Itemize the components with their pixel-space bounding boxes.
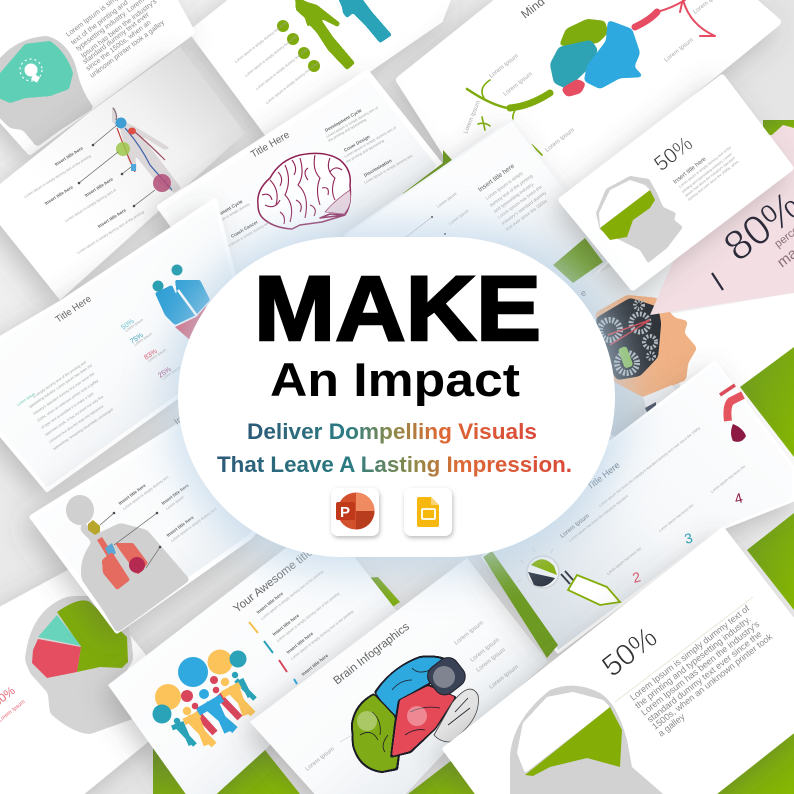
panel: center insert title slide — [345, 120, 610, 310]
side text: the printing and typesetting — [328, 118, 367, 143]
paragraph: a galley — [656, 711, 687, 739]
brain labels: Lorem Ipsum — [489, 664, 520, 691]
green stripe — [483, 551, 558, 658]
body text: typesetting, remaining essentially unchanged — [52, 407, 114, 451]
green icon circles — [277, 20, 320, 72]
pink branch — [635, 0, 715, 36]
paragraph: unknown printer took a galley — [89, 19, 166, 80]
step numbers: 3 — [683, 529, 695, 547]
list items: Insert title here — [301, 653, 329, 677]
step numbers: Lorem Ipsum has been the — [606, 546, 642, 576]
heading: MAKE: MAKE — [254, 258, 541, 360]
callouts: Insert title here — [166, 515, 195, 538]
body text: text ever since the 1500s — [505, 198, 549, 232]
subheading: An Impact: An Impact — [270, 353, 520, 406]
percentages: 75% — [129, 332, 145, 346]
left labels with dots: Lorem Ipsum — [436, 191, 458, 209]
step numbers: 2 — [631, 568, 643, 586]
body text — [678, 145, 740, 202]
rule — [615, 597, 753, 702]
step numbers — [606, 464, 746, 586]
panel: large 50 percent slide — [445, 530, 794, 794]
side text — [205, 106, 413, 252]
two figures — [152, 264, 210, 340]
body text: printing and typesetting industry. Lorem — [681, 152, 733, 194]
panel: pink 80 percent slide — [650, 125, 794, 315]
panel: your awesome title slide — [108, 537, 400, 794]
side text: the printing and typesetting — [346, 139, 385, 164]
leader lines — [78, 125, 155, 207]
body text: specimen book. It has survived not only five — [44, 395, 104, 437]
green figure — [295, 0, 355, 70]
green branch — [467, 80, 550, 155]
percentages: Lorem Ipsum — [161, 366, 181, 381]
side text: Development Cycle — [324, 108, 363, 133]
paragraph — [65, 0, 166, 80]
body text: industry's standard dummy — [501, 190, 548, 226]
panel: head pie chart slide — [0, 566, 153, 794]
title: Title Here — [54, 294, 94, 325]
silhouette — [66, 495, 190, 633]
list items: Lorem Ipsum is simply dummy text of the printing — [276, 592, 340, 643]
branch labels: Lorem Ipsum — [489, 53, 520, 80]
percentages: Lorem Ipsum — [133, 332, 153, 347]
branch labels: Lorem Ipsum — [545, 127, 576, 154]
icon: PowerPoint: P — [340, 504, 350, 521]
branch labels: Lorem Ipsum — [503, 71, 534, 98]
brain labels: Lorem Ipsum — [454, 620, 485, 647]
callout labels: Lorem Ipsum is simply dummy text of the printing — [76, 210, 145, 255]
faucet icon — [720, 385, 746, 442]
callout labels: Insert title here — [54, 145, 84, 167]
step numbers: Lorem Ipsum has been the — [710, 464, 746, 494]
callout labels: Insert title here — [84, 176, 114, 198]
panel: circulatory system slide — [0, 47, 245, 300]
panel: gears head slide — [570, 250, 794, 500]
green stripe beside center slide — [402, 150, 452, 194]
brain labels: Lorem Ipsum — [476, 647, 507, 674]
side text: Discrimination — [363, 158, 393, 178]
paragraph — [628, 603, 775, 739]
panel: brain infographics slide — [250, 558, 548, 794]
body text — [485, 170, 549, 232]
side text: Lorem Ipsum is simply dummy text — [364, 154, 413, 185]
callouts: Insert title here — [118, 483, 147, 506]
lorem item: Lorem Ipsum has been the industry's standard dummy text ever since the 1500s — [598, 426, 701, 508]
icon captions — [234, 20, 319, 105]
paragraph: since the 1500s, when an — [85, 19, 153, 73]
divider tick — [712, 273, 723, 290]
icon captions: Lorem Ipsum is simply dummy text of the — [244, 34, 298, 78]
organs — [116, 118, 126, 128]
50 percent: 50% — [596, 621, 664, 684]
side text: Cover Design — [343, 134, 371, 153]
title: Title Here — [249, 129, 292, 161]
grey head — [0, 36, 94, 147]
body silhouette — [112, 106, 181, 193]
green corner patches — [153, 120, 794, 794]
lorem item: Lorem Ipsum has been the industry's standard — [568, 494, 629, 543]
panel: central white pill — [178, 237, 615, 557]
branch labels: Lorem Ipsum — [664, 37, 695, 64]
lightbulb brain pencil icon — [517, 548, 620, 605]
branch labels — [463, 0, 724, 154]
body text: centuries but also the leap into electronic — [48, 404, 105, 444]
icon captions: Lorem Ipsum is simply dummy text of the — [234, 20, 288, 64]
50 percent: 50% — [650, 132, 697, 176]
branch labels: Lorem Ipsum — [463, 100, 482, 135]
callout labels — [23, 145, 145, 255]
body text — [16, 360, 114, 451]
body text: is simply dummy text of the printing and — [32, 360, 87, 399]
green wedge — [740, 347, 794, 457]
body text: Lorem Ipsum — [16, 392, 36, 407]
paragraph: standard dummy text ever since the — [645, 629, 764, 725]
green brain — [525, 707, 622, 776]
title: Title Here — [585, 460, 622, 492]
paragraph: text of the printing and — [70, 0, 130, 47]
brain line drawing — [258, 153, 351, 229]
head — [596, 176, 683, 263]
light bulb icon — [20, 59, 42, 83]
side text: Lorem Ipsum is simply dummy text of — [326, 106, 379, 139]
leader lines — [100, 512, 161, 568]
panel: faucet steps slide — [483, 362, 794, 658]
trachea and bronchi — [97, 537, 117, 563]
side text: Coach Cancer — [230, 219, 259, 239]
side text: Lorem Ipsum is simply dummy text of — [344, 126, 397, 159]
tagline line 2: That Leave A Lasting Impression. — [217, 452, 572, 477]
percentages: 83% — [143, 348, 159, 362]
brain lobes — [550, 19, 644, 97]
body text: dummy text ever since the 1500s, when — [687, 160, 740, 202]
step numbers: 4 — [733, 489, 745, 507]
body text: Lorem Ipsum is simply dummy text of the — [678, 145, 732, 189]
people — [172, 672, 255, 745]
green stripes — [553, 120, 665, 283]
icon: Google Slides — [404, 488, 452, 536]
teal figure — [337, 0, 392, 43]
panel: mind brain slide — [400, 0, 777, 193]
head profile — [595, 295, 697, 397]
title: Brain Infographics — [331, 621, 412, 687]
left labels with dots — [405, 191, 470, 238]
panel: team statistics slide — [0, 200, 240, 490]
title: Your Awesome title — [231, 546, 315, 615]
coloured brain — [351, 653, 478, 773]
head silhouette — [25, 596, 135, 734]
callout labels: Insert title here — [44, 184, 74, 206]
speech bubbles — [152, 650, 246, 724]
paragraph: Lorem Ipsum is simply dummy text of — [628, 603, 752, 703]
lorem item: Lorem Ipsum — [560, 513, 591, 540]
list items — [249, 570, 354, 684]
body text: Ipsum has been the industry's standard — [684, 156, 736, 198]
side text: Development Cycle — [205, 199, 244, 224]
body text: Lorem Ipsum is simply — [485, 170, 524, 201]
list items: Insert title here — [272, 613, 300, 637]
icon captions: Lorem Ipsum is simply dummy text of the — [265, 61, 319, 105]
list items: Lorem Ipsum is simply dummy text of the printing — [260, 570, 324, 621]
percentages: 50% — [120, 318, 136, 332]
pie wedges — [32, 600, 128, 678]
callout labels: Lorem Ipsum is simply dummy text of the printing — [23, 154, 92, 199]
callout labels: Insert title here — [97, 207, 127, 229]
body text: typesetting industry. Lorem Ipsum has been the — [28, 363, 93, 409]
subtitle: Insert title here — [673, 156, 708, 186]
panel: human figures slide — [192, 0, 450, 137]
title: Insert title here — [477, 162, 516, 194]
side text: Lorem Ipsum is simply dummy text — [220, 221, 270, 252]
callouts: Insert title here — [161, 483, 190, 506]
callouts: Lorem Ipsum is simply dummy text — [170, 507, 217, 543]
panel: maroon brain slide — [160, 73, 440, 300]
panel: lungs slide — [32, 400, 300, 633]
body text: 1500s, when an unknown printer took a galley — [36, 379, 99, 423]
title: Insert — [172, 405, 196, 427]
percentages — [120, 318, 181, 381]
body text: and typesetting industry. — [493, 181, 535, 214]
list items: Lorem Ipsum is simply dummy text of the printing — [290, 610, 354, 661]
green fill — [600, 190, 655, 240]
icon: PowerPoint — [331, 488, 379, 536]
mint brain — [0, 41, 73, 103]
paragraph: Ipsum has been the industry's — [80, 0, 159, 60]
tagline line 1: Deliver Dompelling Visuals — [247, 419, 537, 444]
percentages: 25% — [157, 366, 173, 380]
paragraph: standard dummy text ever — [82, 11, 151, 66]
body text: dummy text of the printing — [489, 173, 534, 208]
vessels — [113, 108, 172, 190]
panel: small 50 percent slide — [562, 78, 790, 287]
caption — [772, 224, 794, 271]
brain labels — [305, 620, 520, 773]
gears brain — [596, 298, 661, 380]
side text: Lorem Ipsum is simply dummy — [206, 202, 251, 230]
body text: industry's standard dummy text ever since the — [32, 372, 95, 416]
collar — [643, 385, 680, 420]
callout labels: Lorem Ipsum is simply dummy text of — [64, 188, 117, 223]
icon captions: Lorem Ipsum is simply dummy text of the — [255, 47, 309, 91]
left labels with dots: Lorem Ipsum — [448, 208, 470, 226]
step numbers: Lorem Ipsum has been the — [658, 503, 694, 533]
callouts — [118, 475, 217, 543]
callouts: Lorem Ipsum — [165, 495, 185, 511]
panel: head with light bulb slide — [0, 0, 192, 152]
head — [510, 686, 670, 794]
body text: Lorem Ipsum has been the — [497, 184, 543, 220]
lorem item — [560, 426, 701, 543]
brain labels: Lorem Ipsum — [470, 637, 501, 664]
paragraph: Lorem Ipsum has been the industry's — [639, 619, 762, 718]
list items: Insert title here — [256, 591, 284, 615]
paragraph: 1500s, when an unknown printer took — [650, 631, 775, 732]
percentages: Lorem Ipsum — [147, 348, 167, 363]
slide title fragment: e — [578, 288, 588, 299]
list items: Insert title here — [286, 631, 314, 655]
callouts: Lorem Ipsum is simply dummy text — [122, 475, 169, 511]
body text: of type and scrambled it to make a type — [40, 391, 95, 430]
pill glow — [170, 225, 625, 570]
paragraph: the printing and typesetting industry. — [633, 614, 753, 711]
lungs — [115, 543, 148, 575]
brain labels: Lorem Ipsum — [305, 746, 336, 773]
percentages: Lorem Ipsum — [124, 318, 144, 333]
